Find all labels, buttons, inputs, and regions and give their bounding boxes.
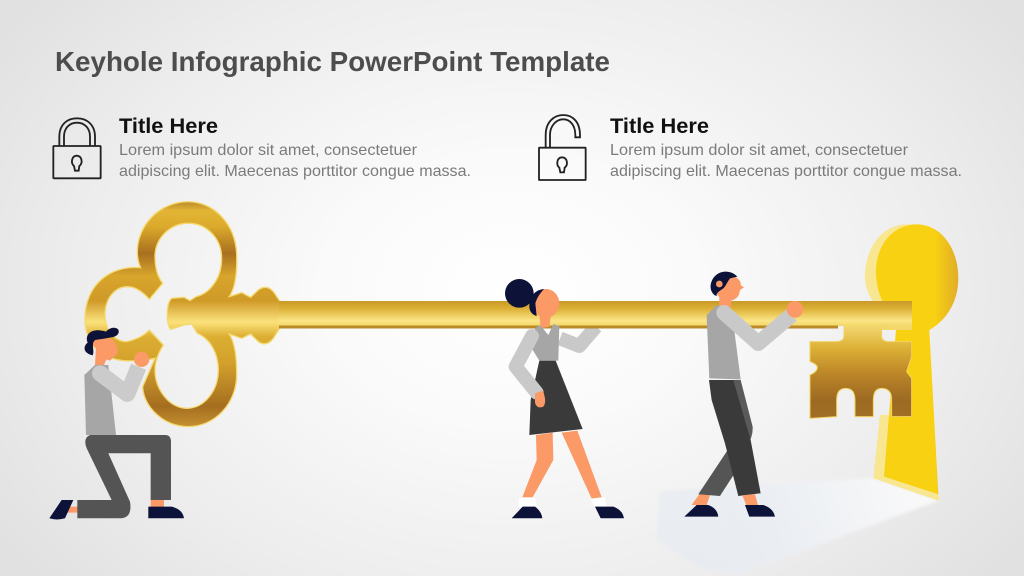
hand xyxy=(535,391,545,407)
shoulder xyxy=(92,365,108,381)
neck xyxy=(539,310,552,328)
keyhole xyxy=(865,224,958,501)
head xyxy=(533,289,559,318)
hand xyxy=(134,352,149,367)
front foot skin xyxy=(742,494,758,506)
ear xyxy=(716,281,723,287)
panel: locked item xyxy=(53,114,471,180)
torso xyxy=(84,365,116,435)
hand xyxy=(787,301,803,318)
neck and head xyxy=(95,347,117,365)
text block: left description: Lorem ipsum dolor sit amet, consectetuer xyxy=(119,142,418,159)
hair xyxy=(529,289,544,316)
side panel xyxy=(732,380,753,447)
key shaft xyxy=(279,301,912,330)
panel: unlocked item xyxy=(539,114,962,180)
person: walking man xyxy=(684,272,803,517)
icon: closed padlock xyxy=(53,118,101,178)
person: kneeling man xyxy=(49,328,184,519)
skirt xyxy=(529,361,583,435)
person arm behind key xyxy=(560,327,596,346)
person: walking woman xyxy=(505,279,624,518)
bun xyxy=(505,279,534,308)
ear xyxy=(93,340,100,348)
key bit xyxy=(810,318,912,418)
title: Keyhole Infographic PowerPoint Template xyxy=(55,46,610,77)
front trouser leg xyxy=(709,380,761,496)
text block: left description: adipiscing elit. Maecenas porttitor congue massa. xyxy=(119,163,471,180)
golden key xyxy=(85,202,912,427)
socks xyxy=(518,497,607,507)
text block: right description: adipiscing elit. Maecenas porttitor congue massa. xyxy=(610,163,962,180)
hair xyxy=(711,272,737,296)
torso xyxy=(707,305,741,379)
back shoe xyxy=(49,500,80,519)
head xyxy=(716,276,744,301)
heading: left title: Title Here xyxy=(119,114,218,138)
key bow xyxy=(85,202,280,427)
back leg skin xyxy=(692,493,710,505)
light beam on floor xyxy=(656,478,940,575)
arm xyxy=(100,367,139,394)
shoulder xyxy=(716,305,732,320)
hair xyxy=(85,328,119,355)
icon: open padlock xyxy=(539,115,586,180)
text block: right description: Lorem ipsum dolor sit amet, consectetuer xyxy=(610,142,909,159)
shoes xyxy=(512,507,624,518)
back trouser leg xyxy=(698,447,740,496)
arm xyxy=(516,336,537,393)
trousers xyxy=(77,435,171,518)
front shoe xyxy=(148,500,184,518)
neck xyxy=(719,295,732,310)
legs xyxy=(522,431,602,499)
blouse xyxy=(532,324,559,361)
shoes xyxy=(684,505,775,517)
arm xyxy=(724,313,792,343)
heading: right title: Title Here xyxy=(610,114,709,138)
